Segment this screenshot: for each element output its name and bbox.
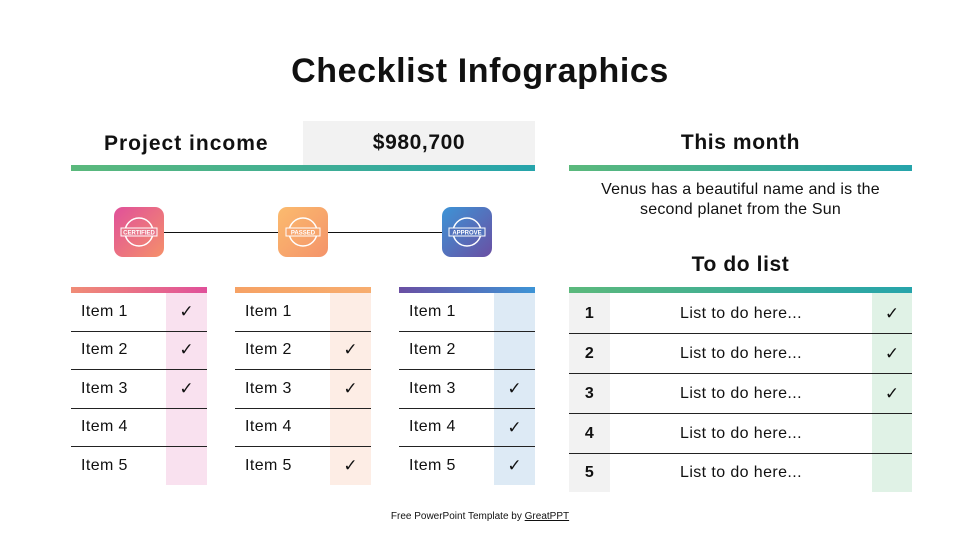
table: to do list: List to do here... [680,464,802,481]
table: checklist 1: Item 1 [81,303,128,320]
table: checklist 2 [235,287,371,485]
table: checklist 3: Item 4 [409,418,456,435]
table: to do list: 2 [585,345,594,362]
table: to do list: 1 [585,305,594,322]
table: checklist 2: ✓ [343,340,358,359]
connector line [164,232,442,233]
table: checklist 3: Item 2 [409,341,456,358]
table: checklist 2: Item 3 [245,380,292,397]
table: to do list: ✓ [885,384,899,403]
table: checklist 2: ✓ [343,456,358,475]
table: checklist 1: ✓ [179,340,194,359]
table: checklist 2: ✓ [343,379,358,398]
icon: approve [442,207,492,257]
table: checklist 1 [71,287,207,485]
table: checklist 2: Item 1 [245,303,292,320]
value box: $980,700 [373,131,465,154]
icon: approve: APPROVE [452,230,482,236]
footer: Free PowerPoint Template by GreatPPT [391,511,569,522]
icon: passed [278,207,328,257]
value box [303,121,535,165]
table: checklist 1: Item 4 [81,418,128,435]
table: checklist 1: Item 2 [81,341,128,358]
table: checklist 3: ✓ [507,418,522,437]
table: checklist 2: Item 2 [245,341,292,358]
table: checklist 3 [399,287,535,485]
table: checklist 1: Item 5 [81,457,128,474]
table: checklist 2: Item 5 [245,457,292,474]
table: checklist 3: Item 1 [409,303,456,320]
table: checklist 1: Item 3 [81,380,128,397]
table: to do list: List to do here... [680,385,802,402]
title: Checklist Infographics [291,52,669,90]
table: to do list: ✓ [885,344,899,363]
icon: certified [114,207,164,257]
table: checklist 3: Item 3 [409,380,456,397]
table: checklist 1: ✓ [179,302,194,321]
panel: this month [569,131,912,218]
table: checklist 2: Item 4 [245,418,292,435]
table: to do list: List to do here... [680,425,802,442]
table: to do list: List to do here... [680,345,802,362]
table: checklist 1: ✓ [179,379,194,398]
description text: Venus has a beautiful name and is the second planet from the Sun [601,181,880,218]
heading: this month: This month [681,131,800,154]
table: to do list: ✓ [885,304,899,323]
table: to do list: List to do here... [680,305,802,322]
panel: project income [71,121,535,171]
label: project income: Project income [104,132,269,155]
table: to do list: 5 [585,464,594,481]
icon: passed: PASSED [291,230,316,236]
table: checklist 3: ✓ [507,456,522,475]
icon: certified: CERTIFIED [123,230,155,236]
table: checklist 3: ✓ [507,379,522,398]
table: checklist 3: Item 5 [409,457,456,474]
table: to do list [569,287,912,492]
heading: to do list: To do list [692,253,789,276]
table: to do list: 3 [585,385,594,402]
table: to do list: 4 [585,425,594,442]
